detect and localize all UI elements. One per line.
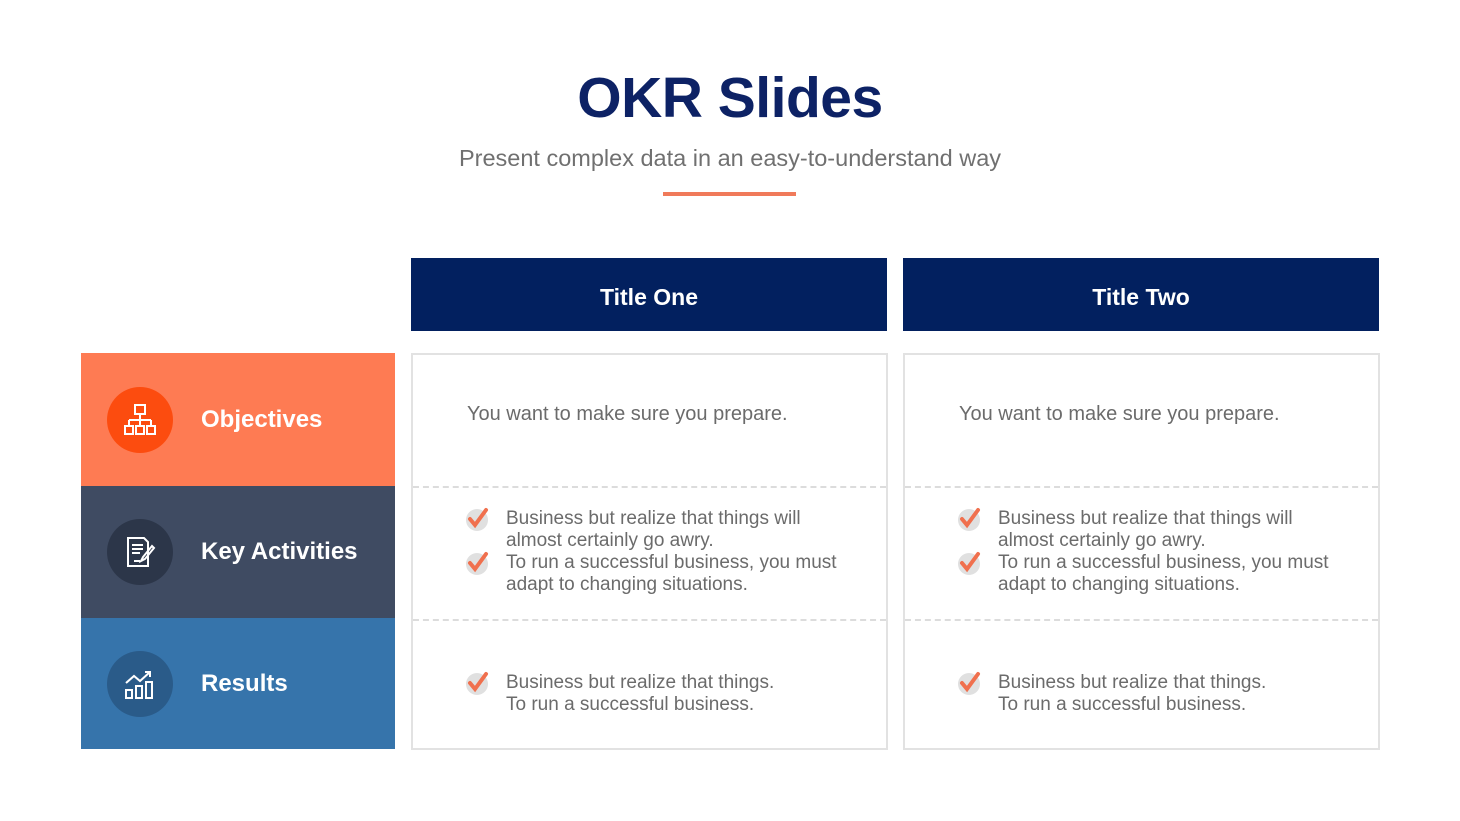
row label: Objectives	[81, 353, 395, 486]
key activities list: almost certainly go awry.	[998, 530, 1206, 551]
subtitle: Present complex data in an easy-to-understand way	[459, 145, 1001, 171]
objective text: You want to make sure you prepare.	[467, 403, 788, 425]
row label: Results: Results	[201, 670, 288, 696]
row label: Key Activities: Key Activities	[201, 538, 358, 565]
key activities list: adapt to changing situations.	[506, 574, 748, 595]
results list: To run a successful business.	[506, 694, 754, 715]
results list: To run a successful business.	[998, 694, 1246, 715]
header: Title Two: Title Two	[1092, 284, 1190, 310]
header: Title Two	[903, 258, 1379, 331]
row label: Results	[81, 618, 395, 749]
icon: hierarchy	[107, 386, 173, 452]
icon: growth chart	[107, 650, 173, 716]
results list	[466, 672, 774, 715]
row label: Objectives: Objectives	[201, 406, 322, 432]
key activities list	[466, 508, 837, 595]
header: Title One: Title One	[600, 284, 698, 310]
key activities list: Business but realize that things will	[998, 508, 1293, 529]
objective text: You want to make sure you prepare.	[959, 403, 1280, 425]
key activities list: To run a successful business, you must	[506, 552, 837, 573]
header: Title One	[411, 258, 887, 331]
key activities list: almost certainly go awry.	[506, 530, 714, 551]
row label: Key Activities	[81, 486, 395, 618]
results list	[958, 672, 1266, 715]
icon: document with pen	[107, 519, 173, 585]
key activities list: adapt to changing situations.	[998, 574, 1240, 595]
key activities list: Business but realize that things will	[506, 508, 801, 529]
key activities list: To run a successful business, you must	[998, 552, 1329, 573]
results list: Business but realize that things.	[506, 672, 774, 693]
title: OKR Slides	[577, 66, 883, 130]
panel: Title Two column	[903, 353, 1380, 750]
results list: Business but realize that things.	[998, 672, 1266, 693]
accent underline	[663, 192, 796, 196]
key activities list	[958, 508, 1329, 595]
panel: Title One column	[411, 353, 888, 750]
